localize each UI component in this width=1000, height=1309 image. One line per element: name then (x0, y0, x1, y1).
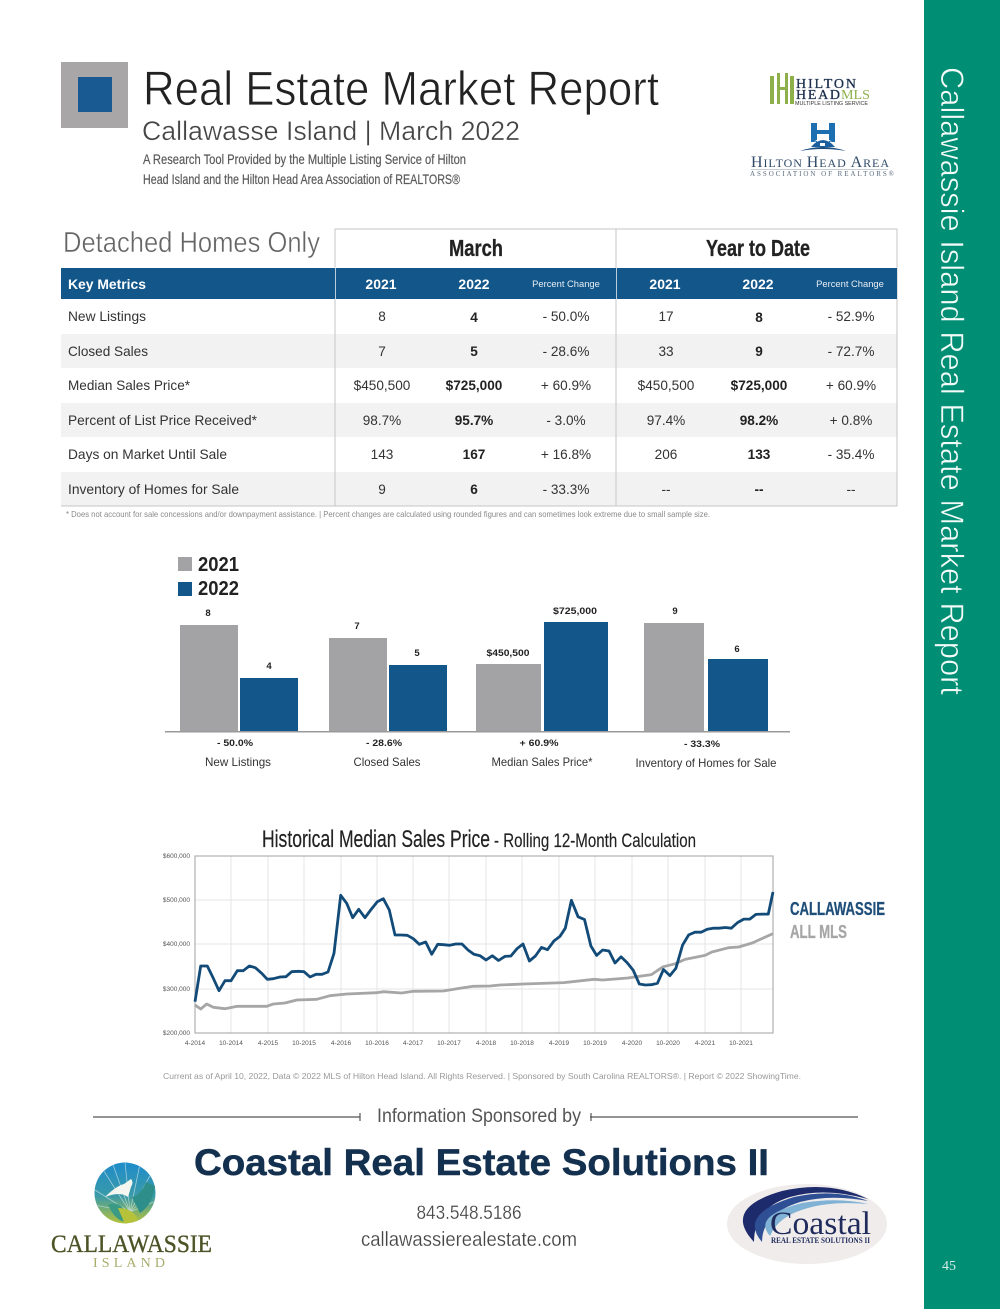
percent change labels: - 28.6% (366, 738, 403, 749)
row: days on market: - 35.4% (828, 447, 874, 462)
line legend (790, 899, 885, 942)
icon: report square (61, 62, 128, 128)
row: inventory: 9 (378, 482, 386, 497)
row: inventory: -- (661, 482, 671, 497)
sponsor heading with rules: Information Sponsored by (377, 1106, 581, 1127)
chart subtitle: - Rolling 12-Month Calculation (494, 831, 696, 852)
heading: detached homes only: Detached Homes Only (63, 227, 320, 259)
category labels: Median Sales Price* (492, 755, 593, 769)
row: new listings: 8 (378, 309, 386, 324)
period headings: March (449, 235, 503, 261)
row: percent of list price: - 3.0% (546, 413, 586, 428)
bar value labels: 9 (672, 606, 678, 617)
chart legend (178, 554, 239, 600)
row: days on market (68, 446, 874, 462)
table header bar: Percent Change (532, 278, 600, 289)
category labels: Inventory of Homes for Sale (636, 756, 777, 770)
x axis labels: 4-2015 (258, 1040, 278, 1047)
row: inventory: Inventory of Homes for Sale (68, 481, 239, 497)
column frames (61, 229, 897, 506)
x axis labels: 4-2014 (185, 1040, 205, 1047)
bar value labels: 8 (205, 608, 211, 619)
intro text: Head Island and the Hilton Head Area Association of REALTORS® (143, 171, 461, 187)
bar value labels: 5 (414, 648, 420, 659)
percent change labels: + 60.9% (520, 738, 559, 749)
row: percent of list price: + 0.8% (830, 413, 872, 428)
table header bar: 2022 (742, 276, 774, 292)
x axis labels: 4-2018 (476, 1040, 496, 1047)
percent change labels: - 50.0% (217, 738, 254, 749)
row: median sales price: + 60.9% (541, 378, 591, 393)
row: closed sales: 5 (470, 344, 478, 359)
row: days on market: 133 (748, 447, 771, 462)
line legend: CALLAWASSIE (790, 899, 885, 919)
row: median sales price: Median Sales Price* (68, 377, 191, 393)
website: callawassierealestate.com (361, 1229, 577, 1251)
y axis labels: $600,000 (163, 853, 190, 860)
logo: Hilton Head Area Association of Realtors (750, 123, 895, 178)
panel: key metrics table (61, 227, 897, 519)
x axis labels: 10-2015 (292, 1040, 316, 1047)
logo: Callawassie Island (51, 1162, 212, 1271)
row: percent of list price: Percent of List Price Received* (68, 412, 258, 428)
logo: Hilton Head MLS (770, 73, 870, 107)
sponsor heading with rules (93, 1106, 858, 1127)
row: new listings: - 52.9% (828, 309, 874, 324)
row: closed sales: - 72.7% (828, 344, 874, 359)
row: new listings: - 50.0% (543, 309, 589, 324)
y axis labels: $300,000 (163, 986, 190, 993)
data source note: Current as of April 10, 2022, Data © 2022 MLS of Hilton Head Island. All Rights Reserved. | Sponsored by South Carolina REALTORS®. | Report © 2022 ShowingTime. (163, 1071, 801, 1081)
x axis labels: 4-2020 (622, 1040, 642, 1047)
logo: Hilton Head MLS: MULTIPLE LISTING SERVICE (795, 101, 869, 107)
row: percent of list price: 95.7% (455, 413, 493, 428)
table header bar: Percent Change (816, 278, 884, 289)
x axis labels (185, 1040, 753, 1047)
row: new listings: New Listings (68, 308, 146, 324)
row: median sales price: $450,500 (354, 378, 411, 393)
bars 2022 (240, 622, 768, 732)
logo: Hilton Head MLS: MLS (841, 88, 870, 103)
row: median sales price (68, 377, 876, 393)
bar value labels: $450,500 (486, 648, 530, 659)
x axis labels: 4-2016 (331, 1040, 351, 1047)
row: median sales price: + 60.9% (826, 378, 876, 393)
title: Real Estate Market Report (143, 63, 659, 116)
y axis labels (163, 853, 190, 1037)
table header bar: 2021 (365, 276, 397, 292)
bar value labels: 7 (354, 621, 360, 632)
bar value labels: 4 (266, 661, 272, 672)
row: new listings: 8 (755, 310, 763, 325)
y axis labels: $400,000 (163, 941, 190, 948)
sponsor name: Coastal Real Estate Solutions II (194, 1142, 769, 1183)
row: percent of list price: 98.7% (363, 413, 401, 428)
subtitle: Callawasse Island | March 2022 (142, 116, 520, 146)
row: closed sales: 7 (378, 344, 386, 359)
period headings (449, 235, 810, 261)
logo: Callawassie Island: CALLAWASSIE (51, 1231, 212, 1258)
row: inventory: - 33.3% (543, 482, 589, 497)
panel: sponsor (93, 1106, 858, 1251)
row: days on market: + 16.8% (541, 447, 591, 462)
row: inventory: -- (846, 482, 856, 497)
row: days on market: 143 (371, 447, 393, 462)
chart title: Historical Median Sales Price (262, 826, 490, 853)
logo: Hilton Head MLS: HILTON (796, 77, 856, 92)
logo: Hilton Head MLS: HEAD (796, 88, 840, 103)
header text block (142, 63, 659, 187)
category labels (205, 755, 777, 770)
row: days on market: 167 (463, 447, 485, 462)
row: percent of list price (68, 412, 872, 428)
row: closed sales: 33 (658, 344, 674, 359)
line legend: ALL MLS (790, 922, 847, 942)
row: new listings: 4 (470, 310, 478, 325)
panel: green sidebar (924, 0, 1000, 1309)
chart legend: 2022 (198, 578, 239, 600)
row: inventory: -- (754, 482, 764, 497)
x axis labels: 10-2021 (729, 1040, 753, 1047)
y axis labels: $500,000 (163, 897, 190, 904)
y axis labels: $200,000 (163, 1030, 190, 1037)
chart legend: 2021 (198, 554, 239, 576)
x axis labels: 4-2019 (549, 1040, 569, 1047)
row: median sales price: $725,000 (446, 378, 502, 393)
row: new listings: 17 (658, 309, 674, 324)
row: median sales price: $450,500 (638, 378, 695, 393)
row: percent of list price: 98.2% (740, 413, 778, 428)
intro text (143, 151, 466, 187)
row: closed sales: Closed Sales (68, 343, 148, 359)
x axis labels: 10-2014 (219, 1040, 243, 1047)
bar value labels: 6 (734, 644, 740, 655)
table footnote: * Does not account for sale concessions and/or downpayment assistance. | Percent changes are calculated using rounded figures and can sometimes look extreme due to small sample size. (66, 509, 710, 519)
table header bar: 2022 (458, 276, 490, 292)
bar value labels (205, 606, 740, 672)
percent change labels: - 33.3% (684, 739, 721, 750)
logo: Hilton Head Area Association of Realtors: HILTON HEAD AREA (751, 154, 889, 171)
period headings: Year to Date (706, 235, 810, 261)
row: inventory (68, 481, 856, 497)
row: inventory: 6 (470, 482, 478, 497)
line: Callawassie (195, 892, 773, 1002)
bar value labels: $725,000 (553, 606, 597, 617)
x axis labels: 4-2021 (695, 1040, 715, 1047)
table header bar: Key Metrics (68, 276, 146, 292)
phone number: 843.548.5186 (416, 1203, 522, 1224)
x axis labels: 10-2019 (583, 1040, 607, 1047)
logo: Coastal Real Estate Solutions II: REAL ESTATE SOLUTIONS II (771, 1235, 871, 1245)
row: days on market: Days on Market Until Sale (68, 446, 227, 462)
logo: Hilton Head Area Association of Realtors: ASSOCIATION OF REALTORS® (750, 170, 895, 178)
x axis labels: 10-2018 (510, 1040, 534, 1047)
logo: Coastal Real Estate Solutions II: Coastal (770, 1206, 871, 1242)
row: days on market: 206 (655, 447, 677, 462)
table header bar (61, 268, 897, 299)
line: all MLS (195, 934, 773, 1009)
x axis labels: 10-2016 (365, 1040, 389, 1047)
row: median sales price: $725,000 (731, 378, 787, 393)
logo: Coastal Real Estate Solutions II (727, 1184, 887, 1264)
intro text: A Research Tool Provided by the Multiple Listing Service of Hilton (143, 151, 466, 167)
panel: historical median sales price line chart (163, 826, 885, 1047)
row: percent of list price: 97.4% (647, 413, 685, 428)
table header bar: 2021 (649, 276, 681, 292)
row: new listings (68, 308, 874, 325)
row: closed sales: 9 (755, 344, 763, 359)
row: closed sales: - 28.6% (543, 344, 589, 359)
x axis labels: 4-2017 (403, 1040, 423, 1047)
category labels: New Listings (205, 755, 271, 769)
row: closed sales (68, 343, 874, 359)
x axis labels: 10-2020 (656, 1040, 680, 1047)
panel: bar chart (165, 554, 790, 770)
page number: 45 (942, 1259, 956, 1274)
table row shading (61, 334, 897, 506)
bars 2021 (180, 623, 704, 732)
percent change labels (217, 738, 721, 750)
logo: Callawassie Island: ISLAND (93, 1256, 165, 1271)
sidebar vertical title: Callawassie Island Real Estate Market Report (934, 67, 970, 695)
x axis labels: 10-2017 (437, 1040, 461, 1047)
category labels: Closed Sales (354, 755, 420, 769)
